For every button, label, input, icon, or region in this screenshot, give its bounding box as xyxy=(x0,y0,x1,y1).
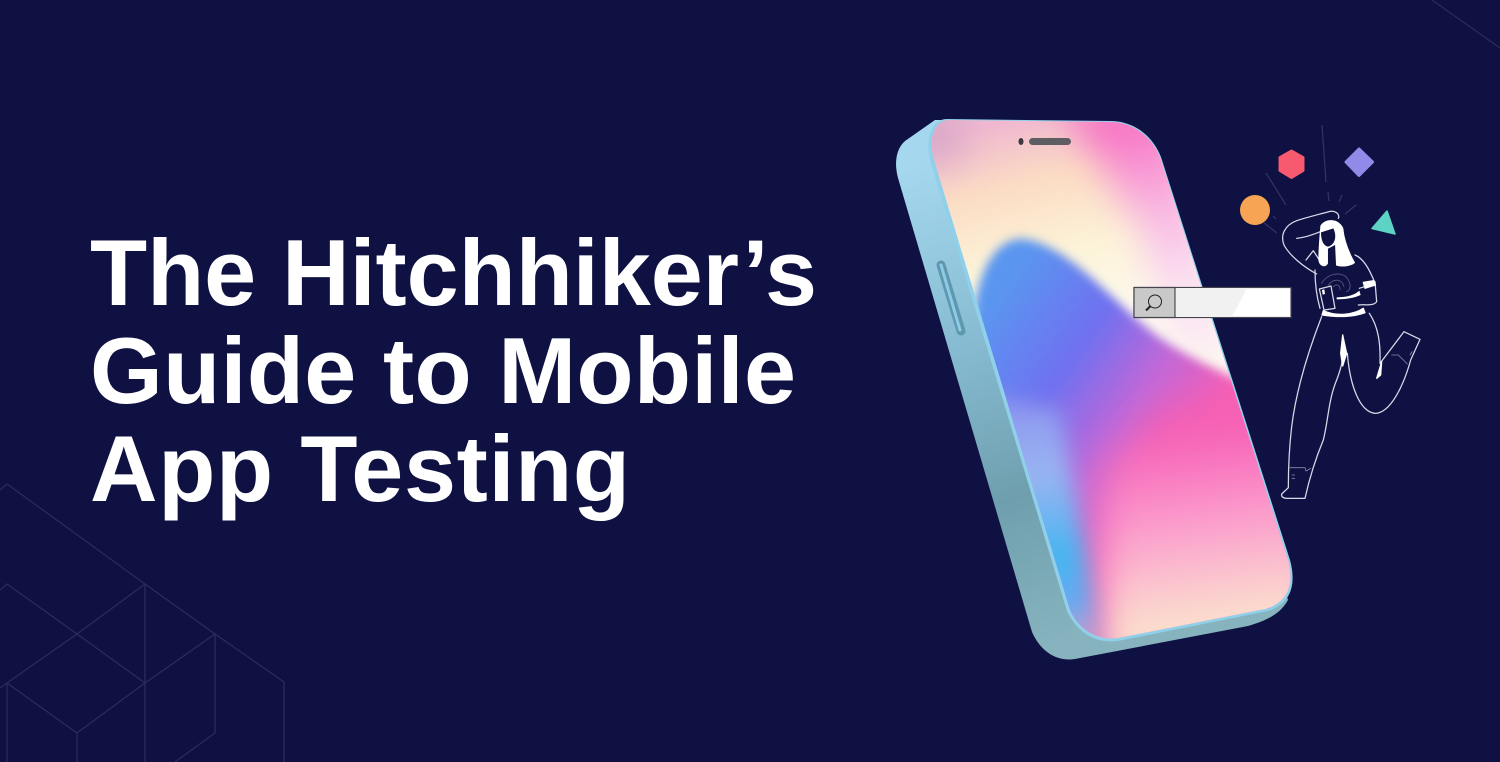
raised arm xyxy=(1283,211,1339,274)
phone bezel xyxy=(928,119,1293,641)
circle xyxy=(1240,195,1270,225)
diamond xyxy=(1346,149,1372,176)
phone body xyxy=(896,120,1288,659)
right leg xyxy=(1347,313,1420,413)
title: The Hitchhiker’s xyxy=(90,220,817,325)
phone illustration xyxy=(896,119,1293,660)
title: Guide to Mobile xyxy=(90,318,796,423)
face xyxy=(1321,228,1335,247)
burst lines xyxy=(1264,125,1356,233)
triangle xyxy=(1372,211,1395,234)
white leg highlights xyxy=(1341,335,1347,366)
title: App Testing xyxy=(90,416,630,521)
woman line illustration xyxy=(1282,211,1420,498)
title xyxy=(90,220,817,521)
side button xyxy=(941,265,961,331)
decorative hexagon lines bottom left xyxy=(0,484,284,762)
hair xyxy=(1319,221,1354,266)
phone in hand xyxy=(1319,286,1335,310)
torso and shirt xyxy=(1355,255,1375,288)
shirt print xyxy=(1322,274,1350,292)
leg details xyxy=(1290,352,1412,478)
decorative line top right xyxy=(1432,0,1500,48)
search icon box xyxy=(1134,288,1175,318)
hexagon xyxy=(1280,151,1303,178)
search bar xyxy=(1134,288,1291,318)
front camera xyxy=(1018,138,1024,145)
floating shapes xyxy=(1240,149,1395,234)
magnifier icon xyxy=(1146,295,1162,310)
speaker xyxy=(1029,138,1071,145)
phone screen gradient xyxy=(932,120,1290,638)
left leg xyxy=(1282,317,1343,498)
